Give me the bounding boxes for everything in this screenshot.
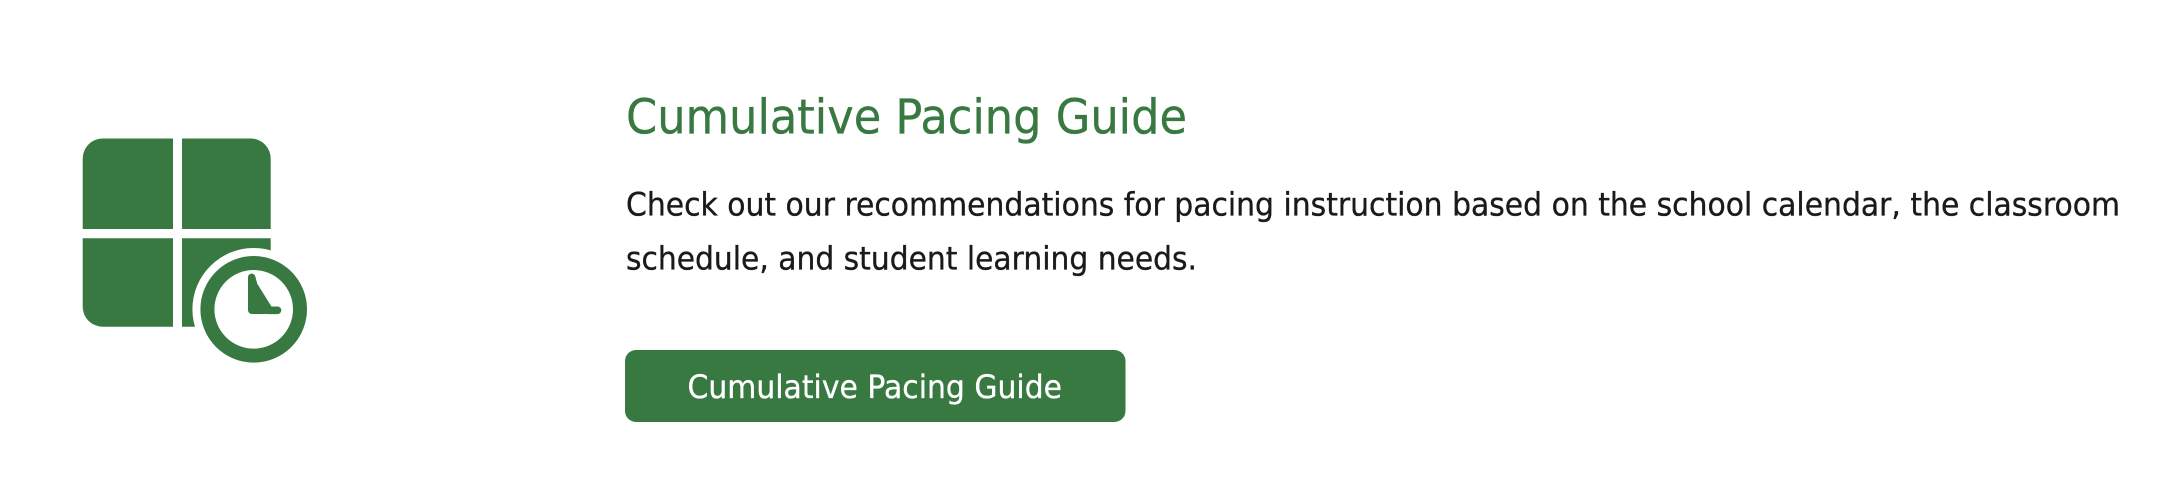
icon: clock hands [252, 277, 278, 310]
body text [626, 186, 2120, 278]
button background [625, 350, 1126, 422]
heading: Cumulative Pacing Guide [626, 90, 1187, 146]
icon: grid top-right cell [182, 138, 271, 229]
body text line 2: schedule, and student learning needs. [626, 240, 1197, 278]
button label: Cumulative Pacing Guide [688, 368, 1062, 406]
button [625, 350, 1126, 422]
icon: clock ring [207, 263, 300, 356]
icon: grid bottom-left cell [83, 238, 173, 327]
icon: grid top-left cell [83, 138, 173, 229]
icon: calendar grid with clock [83, 138, 315, 371]
icon: white halo around clock [192, 248, 315, 371]
icon: grid bottom-right cell [182, 238, 271, 327]
